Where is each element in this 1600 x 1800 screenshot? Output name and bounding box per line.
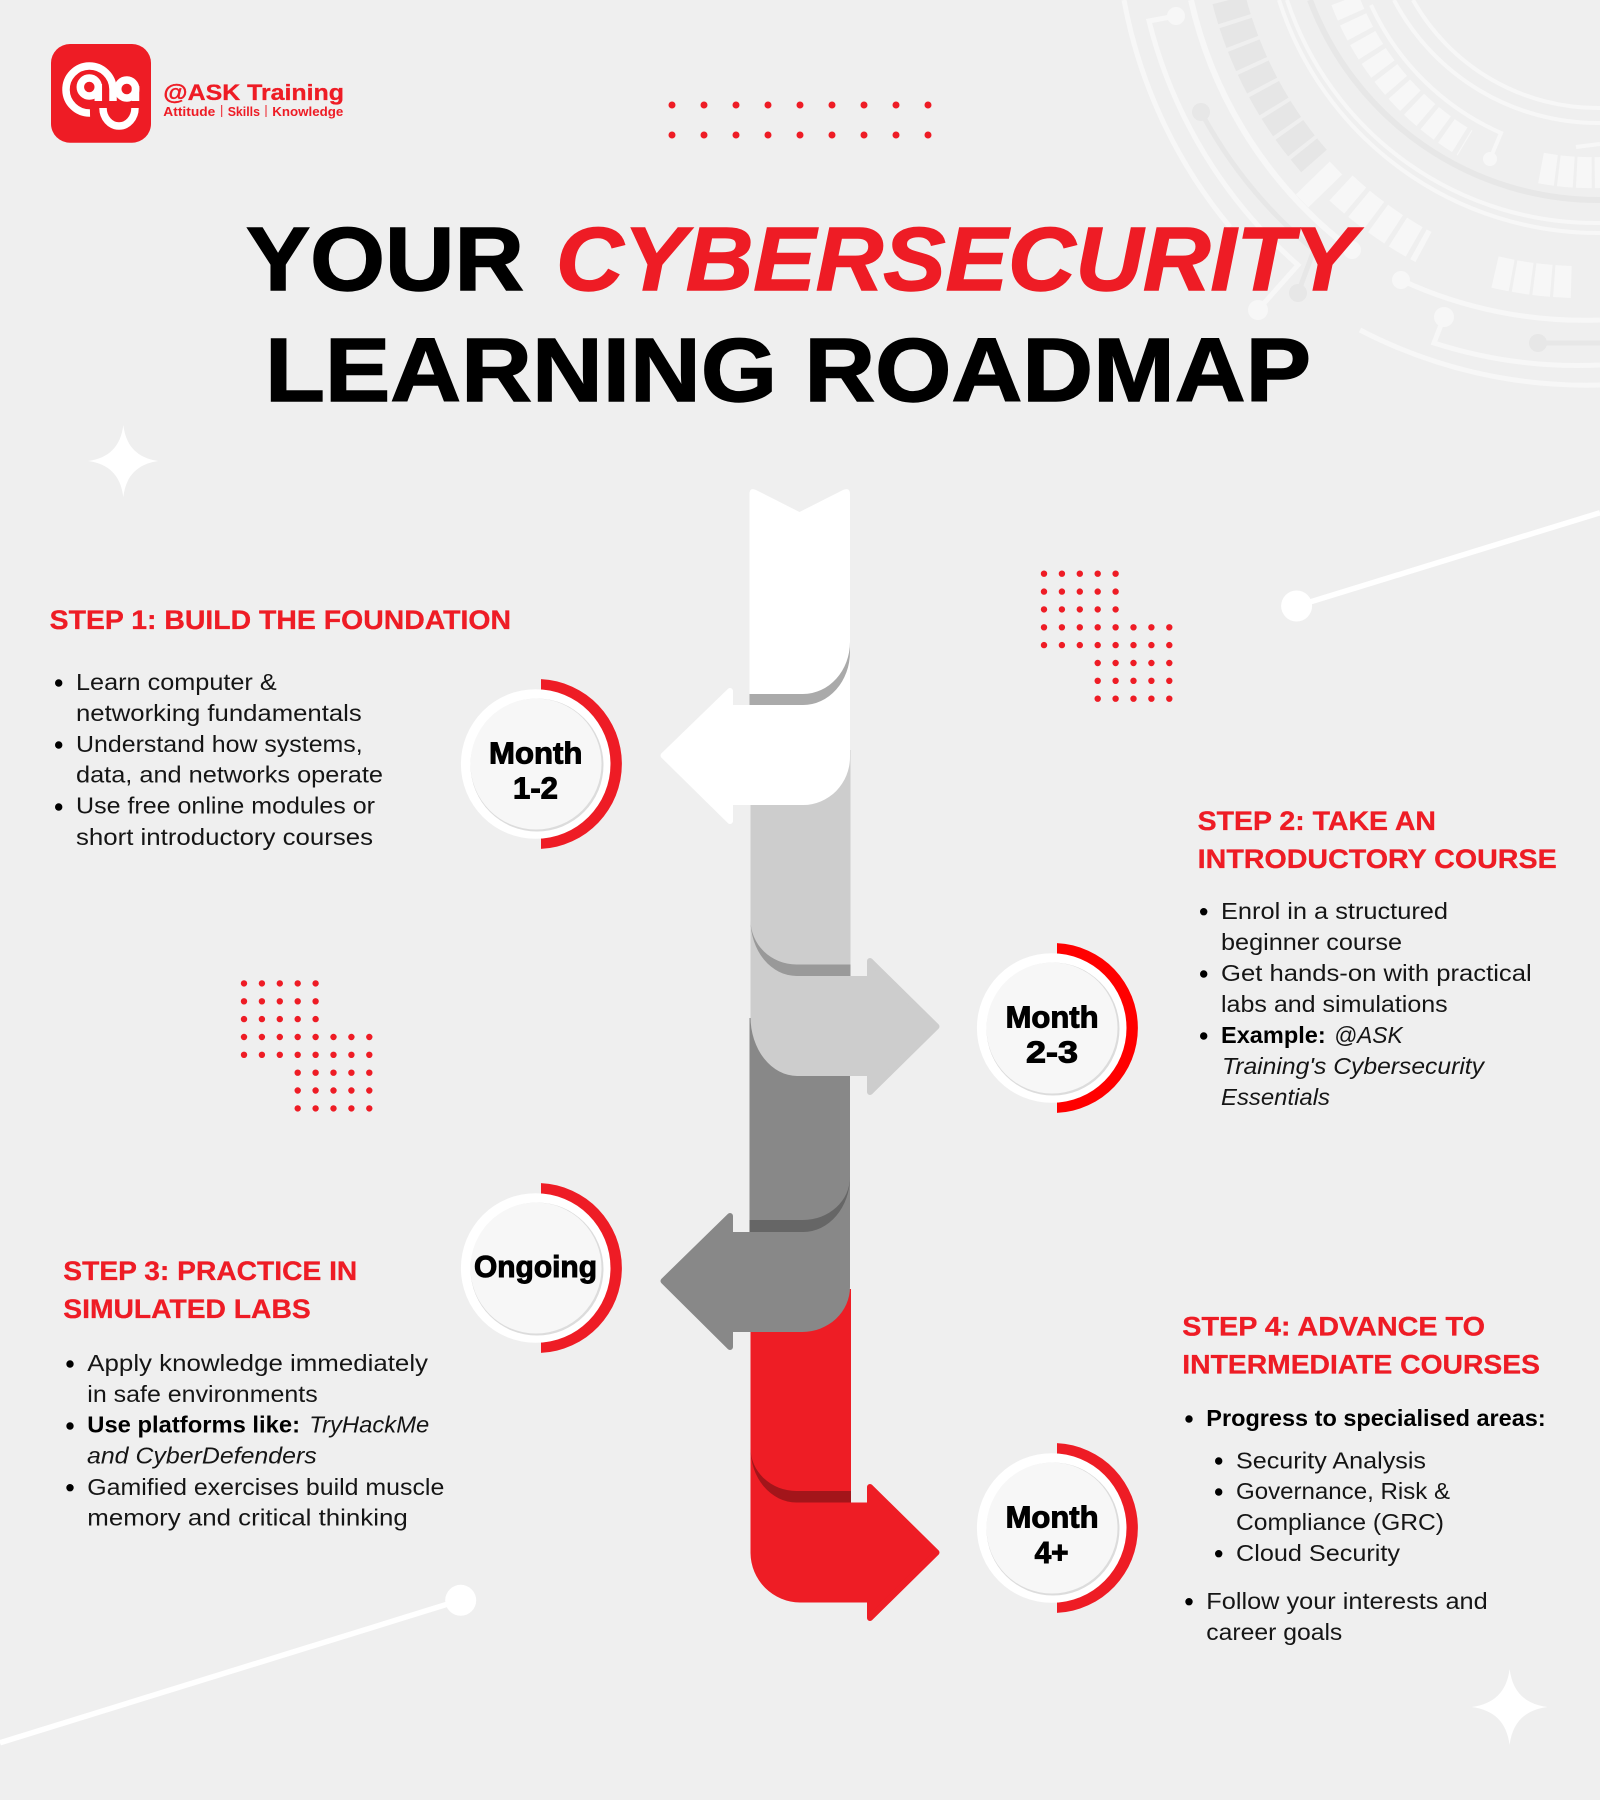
list: step 3 bullets: and CyberDefenders (87, 1443, 317, 1469)
arrow segment 1: white, month 1-2 (664, 489, 850, 821)
badge: month 2-3: Month (1006, 1000, 1099, 1035)
list: step 1 bullets: Use free online modules or (76, 793, 375, 819)
heading: step 1: STEP 1: BUILD THE FOUNDATION (50, 605, 511, 635)
list: step 3 bullets: in safe environments (87, 1381, 318, 1407)
title: YOUR (246, 210, 524, 310)
badge: ongoing (461, 1183, 622, 1353)
badge: month 4+ (977, 1443, 1138, 1613)
panel: step 2 (1198, 806, 1557, 1110)
heading: step 2 (1198, 806, 1557, 874)
list: step 2 bullets: beginner course (1221, 929, 1402, 955)
dot grid, right (1044, 574, 1170, 699)
logo wordmark: Skills (228, 104, 260, 119)
list: step 3 bullets: TryHackMe (309, 1412, 429, 1438)
badge: ongoing: Ongoing (474, 1249, 597, 1284)
list: step 3 bullets (66, 1350, 444, 1531)
badge: month 4+: 4+ (1035, 1535, 1069, 1570)
heading: step 4: INTERMEDIATE COURSES (1182, 1349, 1540, 1379)
heading: step 3: STEP 3: PRACTICE IN (63, 1256, 357, 1286)
list: step 1 bullets: short introductory courses (76, 824, 373, 850)
decorative line with node, bottom left (0, 1585, 476, 1743)
icon: logo badge (51, 44, 151, 143)
heading: step 2: STEP 2: TAKE AN (1198, 806, 1436, 836)
logo wordmark (163, 80, 344, 119)
logo: @ASK Training (51, 44, 344, 143)
list: step 3 bullets: memory and critical thinking (87, 1505, 408, 1531)
list: step 1 bullets: Understand how systems, (76, 731, 363, 757)
list: step 2 bullets (1200, 898, 1532, 1110)
list: step 2 bullets: labs and simulations (1221, 991, 1448, 1017)
list: step 2 bullets: Training's Cybersecurity (1222, 1053, 1485, 1079)
list: step 3 bullets: Use platforms like: (87, 1412, 300, 1438)
list: step 4 bullets: Cloud Security (1236, 1540, 1400, 1566)
badge: month 4+: Month (1006, 1500, 1099, 1534)
list: step 1 bullets: data, and networks operate (76, 762, 383, 788)
heading: step 2: INTRODUCTORY COURSE (1198, 844, 1557, 874)
list: step 4 bullets (1185, 1405, 1546, 1645)
list: step 4 bullets: Progress to specialised areas: (1206, 1405, 1546, 1431)
title (246, 210, 1363, 421)
list: step 4 bullets: Compliance (GRC) (1236, 1509, 1444, 1535)
panel: step 3 (63, 1256, 444, 1531)
arrow segment 4: red, month 4+ (750, 1289, 936, 1618)
list: step 3 bullets: Apply knowledge immediately (87, 1350, 428, 1376)
logo wordmark: Attitude (163, 104, 215, 119)
badge: month 1-2: Month (489, 736, 582, 770)
list: step 2 bullets: Essentials (1221, 1084, 1330, 1110)
badge: month 1-2: 1-2 (513, 770, 558, 805)
list: step 4 bullets: career goals (1206, 1619, 1342, 1645)
dot row pattern, header (672, 105, 930, 135)
dot grid, left (244, 983, 370, 1108)
logo wordmark: @ASK Training (163, 80, 344, 105)
sparkle, lower right (1472, 1669, 1548, 1745)
panel: step 4 (1182, 1312, 1546, 1645)
arrow segment 3: dark grey, ongoing (664, 1018, 850, 1347)
list: step 2 bullets: Example: (1221, 1022, 1326, 1048)
heading: step 4: STEP 4: ADVANCE TO (1182, 1312, 1485, 1342)
heading: step 3: SIMULATED LABS (63, 1294, 311, 1324)
list: step 1 bullets (55, 669, 383, 850)
background: circuit ring decoration (1124, 0, 1600, 385)
logo wordmark: Knowledge (272, 104, 343, 119)
sparkle, upper left (88, 425, 158, 497)
badge: month 2-3: 2-3 (1026, 1035, 1078, 1070)
list: step 2 bullets: Get hands-on with practical (1221, 960, 1532, 986)
panel: step 1 (50, 605, 511, 850)
list: step 4 bullets: Security Analysis (1236, 1447, 1426, 1473)
list: step 2 bullets: @ASK (1334, 1022, 1404, 1048)
list: step 2 bullets: Enrol in a structured (1221, 898, 1448, 924)
list: step 3 bullets: Gamified exercises build muscle (87, 1474, 444, 1500)
arrow segment 2: light grey, month 2-3 (750, 750, 936, 1092)
decorative line with node, top right (1281, 513, 1600, 622)
list: step 1 bullets: Learn computer & (76, 669, 277, 695)
title: LEARNING ROADMAP (265, 321, 1311, 421)
badge: month 2-3 (977, 943, 1138, 1113)
heading: step 4 (1182, 1312, 1540, 1379)
heading: step 3 (63, 1256, 357, 1324)
roadmap arrow chain (664, 489, 936, 1618)
badge: month 1-2 (461, 679, 622, 849)
list: step 4 bullets: Governance, Risk & (1236, 1478, 1450, 1504)
list: step 1 bullets: networking fundamentals (76, 700, 362, 726)
title: CYBERSECURITY (556, 210, 1363, 310)
list: step 4 bullets: Follow your interests and (1206, 1588, 1488, 1614)
